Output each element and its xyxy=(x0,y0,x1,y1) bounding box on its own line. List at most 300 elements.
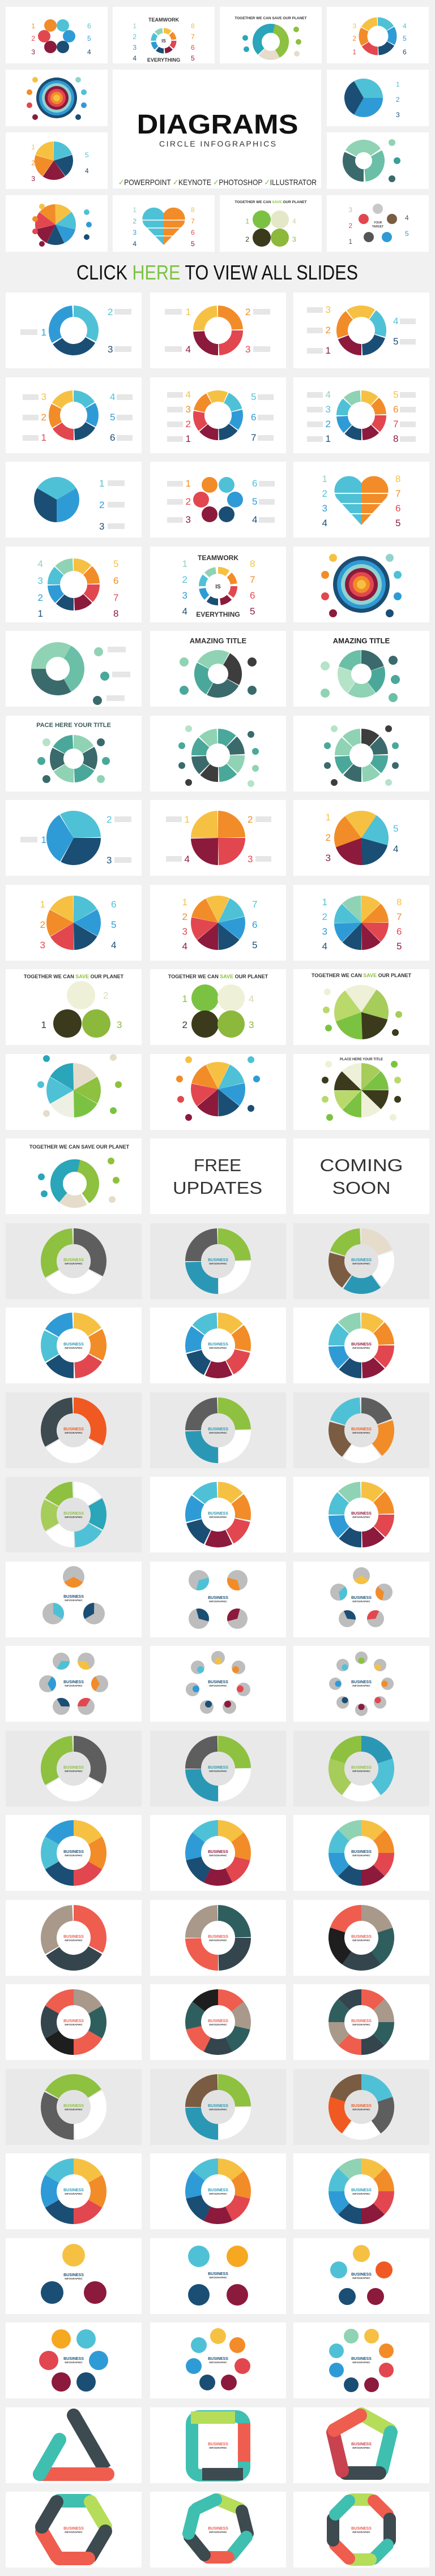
row 3: teamwork: 3 xyxy=(182,590,187,601)
row 2: hexagons: 3 xyxy=(186,514,191,525)
row 6: pie 4: 4 xyxy=(185,854,190,865)
tile: 6 ring: 1 xyxy=(352,48,356,56)
software list: ✓POWERPOINT ✓KEYNOTE ✓PHOTOSHOP ✓ILLUSTRATOR xyxy=(118,178,317,187)
row 1: 6 ring: 4 xyxy=(110,392,115,402)
row 7: pie 6: 6 xyxy=(111,899,116,910)
row 14: swirl 8: INFOGRAPHIC xyxy=(352,1516,371,1519)
tile: teamwork ring xyxy=(113,7,215,63)
tile: heart: 3 xyxy=(133,229,137,236)
row 2: yin yang: 3 xyxy=(99,521,104,532)
row 7: pie 7: 4 xyxy=(182,941,187,952)
row 2: hexagons: 6 xyxy=(252,478,257,489)
tile: pie 5: 3 xyxy=(31,175,35,183)
tile: teamwork ring: 8 xyxy=(191,22,195,30)
row 18: puzzle 7: INFOGRAPHIC xyxy=(209,1854,228,1857)
tile: hexagons: 6 xyxy=(87,22,91,30)
row 7: pie 8: 8 xyxy=(396,897,402,908)
row 2: hexagons: 5 xyxy=(252,496,257,507)
tile: 6 ring: 4 xyxy=(403,22,407,30)
row 9: planet petals 6 xyxy=(6,1054,142,1130)
row 6: pie 3 xyxy=(6,800,142,876)
tile: 6 ring: 3 xyxy=(352,22,356,30)
row 13: 5: BUSINESS xyxy=(351,1427,372,1431)
row 1: 6 ring xyxy=(6,377,142,453)
row 4: amazing title 4: AMAZING TITLE xyxy=(190,637,247,645)
row 2: heart: 1 xyxy=(322,474,327,484)
row 3: petal ring 8: 1 xyxy=(38,608,43,619)
row 8: clover 4: 3 xyxy=(249,1020,254,1030)
tile: heart: 1 xyxy=(133,206,137,214)
tile: yin yang: 2 xyxy=(396,96,400,104)
row 26: hexagon 6: BUSINESS xyxy=(63,2527,84,2531)
row 3: target xyxy=(293,547,429,622)
row 3: teamwork: 1 xyxy=(182,558,187,569)
row 1: 7 ring: 5 xyxy=(251,392,256,402)
row 11: business 5: BUSINESS xyxy=(351,1258,372,1262)
row 6: pie 5 xyxy=(293,800,429,876)
row 25: square: BUSINESS xyxy=(208,2442,228,2446)
row 1: 7 ring: 7 xyxy=(251,432,256,443)
tile: pie 5: 2 xyxy=(31,159,35,167)
row 12: business 7 xyxy=(150,1308,286,1383)
row 20: coral 6 xyxy=(6,1984,142,2060)
tile: heart: 7 xyxy=(191,217,195,225)
row 7: pie 7: 2 xyxy=(182,911,187,922)
row 22: shutter 7: BUSINESS xyxy=(208,2188,228,2192)
row 1: 8 ring: 5 xyxy=(393,389,398,400)
row 9: petals 8 green: PLACE HERE YOUR TITLE xyxy=(340,1058,383,1061)
row 15: gray circles 5 xyxy=(293,1562,429,1637)
row 20: coral 7: BUSINESS xyxy=(208,2019,228,2023)
row 22: shutter 6: INFOGRAPHIC xyxy=(65,2192,83,2195)
row 4: amazing title 5 xyxy=(293,631,429,707)
row 11: business 3 xyxy=(6,1223,142,1299)
tile: 6 ring: 2 xyxy=(352,35,356,42)
tile: teamwork ring: 5 xyxy=(191,54,195,62)
row 3: teamwork: 7 xyxy=(250,574,255,585)
row 17: puzzle 3 xyxy=(6,1731,142,1807)
row 1: 7 ring: 6 xyxy=(251,412,256,423)
row 6: pie 3: 1 xyxy=(41,835,46,845)
row 3: teamwork: EVERYTHING xyxy=(196,610,240,618)
tile: heart: 6 xyxy=(191,229,195,236)
tile: your target: 5 xyxy=(405,230,409,238)
tile: your target: 1 xyxy=(348,238,352,246)
row 11: business 4: BUSINESS xyxy=(208,1258,228,1262)
row 0: 3 ring: 1 xyxy=(41,327,46,338)
tile: heart: 4 xyxy=(133,240,137,248)
row 2: heart: 5 xyxy=(395,518,400,528)
row 11: business 4 xyxy=(150,1223,286,1299)
row 16: gray circles 6: INFOGRAPHIC xyxy=(65,1684,83,1687)
row 23: colored circles 5: INFOGRAPHIC xyxy=(352,2277,371,2280)
row 12: business 6: INFOGRAPHIC xyxy=(65,1347,83,1349)
row 7: pie 8: 1 xyxy=(322,897,327,908)
row 24: colored circles 6: INFOGRAPHIC xyxy=(65,2361,83,2364)
title: DIAGRAMS xyxy=(137,110,298,140)
row 4: amazing title 4 xyxy=(150,631,286,707)
row 1: 8 ring: 4 xyxy=(326,389,331,400)
row 19: coral 4 xyxy=(150,1900,286,1976)
row 1: 8 ring: 8 xyxy=(393,433,398,444)
tile: teamwork ring: 2 xyxy=(133,33,137,41)
tile: clover: 1 xyxy=(245,217,249,225)
row 8: clover 4: 4 xyxy=(249,994,254,1004)
row 22: shutter 8: BUSINESS xyxy=(351,2188,372,2192)
tile: 6 ring xyxy=(327,7,429,63)
row 2: heart xyxy=(293,462,429,537)
tile: heart: 8 xyxy=(191,206,195,214)
tile: teamwork ring: 7 xyxy=(191,33,195,41)
row 3: petal ring 8: 7 xyxy=(113,592,118,603)
row 7: pie 6: 1 xyxy=(40,899,45,910)
tile: 6 ring: 6 xyxy=(403,48,407,56)
row 3: teamwork: IS xyxy=(215,584,221,590)
tile: planet swirl: TOGETHER WE CAN SAVE OUR PLANET xyxy=(234,16,307,20)
tile: your target xyxy=(327,195,429,252)
row 1: 7 ring xyxy=(150,377,286,453)
row 6: pie 3: 3 xyxy=(106,855,112,866)
row 10: planet swirl xyxy=(6,1138,142,1214)
tile: yin yang xyxy=(327,70,429,126)
row 26: heptagon 7: BUSINESS xyxy=(208,2527,228,2531)
row 13: 5: INFOGRAPHIC xyxy=(352,1431,371,1434)
tile: pie 5: 1 xyxy=(31,143,35,151)
row 8: petals 5 xyxy=(293,969,429,1045)
subtitle: CIRCLE INFOGRAPHICS xyxy=(159,139,276,148)
row 8: clover 4: TOGETHER WE CAN SAVE OUR PLANET xyxy=(168,974,268,979)
row 24: colored circles 6: BUSINESS xyxy=(63,2357,84,2361)
row 18: puzzle 6: BUSINESS xyxy=(63,1850,84,1854)
row 12: business 8: INFOGRAPHIC xyxy=(352,1347,371,1349)
row 20: coral 8 xyxy=(293,1984,429,2060)
row 18: puzzle 7: BUSINESS xyxy=(208,1850,228,1854)
row 14: swirl 7 xyxy=(150,1477,286,1553)
row 12: business 7: BUSINESS xyxy=(208,1343,228,1347)
row 12: business 8 xyxy=(293,1308,429,1383)
row 16: gray circles 7: BUSINESS xyxy=(208,1680,228,1684)
row 23: colored circles 4: BUSINESS xyxy=(208,2272,228,2276)
row 16: gray circles 7: INFOGRAPHIC xyxy=(209,1684,228,1687)
row 21: swirl 5 gray: INFOGRAPHIC xyxy=(352,2108,371,2111)
row 11: business 4: INFOGRAPHIC xyxy=(209,1262,228,1265)
row 3: petal ring 8 xyxy=(6,547,142,622)
row 0: 3 ring: 2 xyxy=(108,307,113,317)
row 20: coral 7 xyxy=(150,1984,286,2060)
row 25: square: INFOGRAPHIC xyxy=(209,2446,228,2449)
tile: heart xyxy=(113,195,215,252)
row 5: swirl 8 b xyxy=(293,716,429,792)
row 15: gray circles 3: BUSINESS xyxy=(63,1595,84,1599)
row 7: pie 7: 3 xyxy=(182,926,187,937)
row 17: puzzle 5 xyxy=(293,1731,429,1807)
row 12: business 7: INFOGRAPHIC xyxy=(209,1347,228,1349)
tile: your target: YOUR xyxy=(374,221,382,225)
row 19: coral 5: BUSINESS xyxy=(351,1935,372,1939)
tile: teamwork ring: EVERYTHING xyxy=(147,57,180,63)
row 3: teamwork: 6 xyxy=(250,590,255,601)
row 21: swirl 4 gray: BUSINESS xyxy=(208,2104,228,2108)
row 10: free updates: UPDATES xyxy=(173,1178,262,1198)
row 7: pie 6 xyxy=(6,885,142,961)
row 14: hexagon swirl 6: INFOGRAPHIC xyxy=(65,1516,83,1519)
row 0: 5 ring: 4 xyxy=(393,316,398,326)
row 19: coral 3: BUSINESS xyxy=(63,1935,84,1939)
row 20: coral 6: BUSINESS xyxy=(63,2019,84,2023)
row 17: puzzle 4: INFOGRAPHIC xyxy=(209,1770,228,1773)
row 14: swirl 8 xyxy=(293,1477,429,1553)
row 7: pie 8: 4 xyxy=(322,941,327,952)
row 18: puzzle 8: BUSINESS xyxy=(351,1850,372,1854)
row 17: puzzle 5: INFOGRAPHIC xyxy=(352,1770,371,1773)
row 21: swirl 3 gray: BUSINESS xyxy=(63,2104,84,2108)
row 1: 6 ring: 5 xyxy=(110,412,115,423)
row 0: 3 ring: 3 xyxy=(108,344,113,355)
row 8: planet 3 circles: 1 xyxy=(41,1020,46,1030)
row 14: swirl 7: INFOGRAPHIC xyxy=(209,1516,228,1519)
row 0: 5 ring: 2 xyxy=(326,325,331,336)
row 14: hexagon swirl 6: BUSINESS xyxy=(63,1512,84,1516)
row 10: coming soon: COMING xyxy=(319,1155,403,1175)
row 5: pace here your title: PACE HERE YOUR TITLE xyxy=(36,722,111,729)
tile: teamwork ring: IS xyxy=(161,38,166,44)
tile: clover: 4 xyxy=(292,217,296,225)
row 10: free updates xyxy=(150,1138,286,1214)
row 16: gray circles 8: INFOGRAPHIC xyxy=(352,1684,371,1687)
row 11: business 3: BUSINESS xyxy=(63,1258,84,1262)
row 6: pie 5: 4 xyxy=(393,844,398,854)
row 13: triangle 3: BUSINESS xyxy=(63,1427,84,1431)
row 19: coral 3 xyxy=(6,1900,142,1976)
row 5: pace here your title xyxy=(6,716,142,792)
tile: your target: 3 xyxy=(348,206,352,214)
row 1: 7 ring: 3 xyxy=(186,404,191,415)
row 0: 5 ring xyxy=(293,293,429,368)
row 10: free updates: FREE xyxy=(194,1155,241,1175)
row 14: hexagon swirl 6 xyxy=(6,1477,142,1553)
row 18: puzzle 8 xyxy=(293,1815,429,1891)
row 13: 4: INFOGRAPHIC xyxy=(209,1431,228,1434)
row 2: yin yang xyxy=(6,462,142,537)
row 26: heptagon 7 xyxy=(150,2492,286,2568)
row 6: pie 5: 5 xyxy=(393,823,398,834)
row 7: pie 8: 7 xyxy=(396,911,402,922)
row 25: pentagon: INFOGRAPHIC xyxy=(352,2446,371,2449)
row 4: swirl 3 xyxy=(6,631,142,707)
row 8: planet 3 circles: 3 xyxy=(117,1020,122,1030)
tile: pie 5 xyxy=(6,132,108,189)
tile: clover: 3 xyxy=(292,235,296,243)
row 8: petals 5: TOGETHER WE CAN SAVE OUR PLANET xyxy=(312,973,412,978)
row 9: petals 7 colorful xyxy=(150,1054,286,1130)
row 20: coral 8: BUSINESS xyxy=(351,2019,372,2023)
row 14: swirl 7: BUSINESS xyxy=(208,1512,228,1516)
row 6: pie 4 xyxy=(150,800,286,876)
row 8: clover 4: 2 xyxy=(182,1020,187,1030)
tile: mint swirl xyxy=(327,132,429,189)
row 0: 4 ring: 4 xyxy=(186,344,191,355)
row 6: pie 5: 1 xyxy=(326,812,331,823)
row 18: puzzle 8: INFOGRAPHIC xyxy=(352,1854,371,1857)
row 6: pie 4: 1 xyxy=(185,814,190,825)
row 0: 5 ring: 5 xyxy=(393,336,398,347)
tile: hexagons: 2 xyxy=(31,35,35,42)
row 7: pie 7 xyxy=(150,885,286,961)
row 3: teamwork: 4 xyxy=(182,606,187,617)
row 24: colored circles 8 xyxy=(293,2323,429,2398)
row 3: petal ring 8: 6 xyxy=(113,575,118,586)
row 25: pentagon xyxy=(293,2407,429,2483)
panel: title card xyxy=(113,70,321,188)
row 21: swirl 5 gray: BUSINESS xyxy=(351,2104,372,2108)
row 26: hexagon 6: INFOGRAPHIC xyxy=(65,2531,83,2534)
row 0: 3 ring xyxy=(6,293,142,368)
row 7: pie 8: 2 xyxy=(322,911,327,922)
row 3: petal ring 8: 5 xyxy=(113,558,118,569)
row 7: pie 6: 5 xyxy=(111,919,116,930)
row 11: business 3: INFOGRAPHIC xyxy=(65,1262,83,1265)
row 23: colored circles 3: INFOGRAPHIC xyxy=(65,2277,83,2280)
row 15: gray circles 4: BUSINESS xyxy=(208,1596,228,1600)
row 17: puzzle 4 xyxy=(150,1731,286,1807)
row 1: 7 ring: 4 xyxy=(186,389,191,400)
row 2: yin yang: 1 xyxy=(99,478,104,489)
row 0: 4 ring: 2 xyxy=(245,307,250,317)
row 24: colored circles 8: BUSINESS xyxy=(351,2357,372,2361)
row 25: square xyxy=(150,2407,286,2483)
tile: teamwork ring: 3 xyxy=(133,44,137,51)
row 20: coral 7: INFOGRAPHIC xyxy=(209,2023,228,2026)
row 17: puzzle 4: BUSINESS xyxy=(208,1766,228,1770)
row 20: coral 8: INFOGRAPHIC xyxy=(352,2023,371,2026)
row 22: shutter 8: INFOGRAPHIC xyxy=(352,2192,371,2195)
row 23: colored circles 3 xyxy=(6,2238,142,2314)
row 0: 4 ring: 1 xyxy=(186,307,191,317)
tile: clover: 2 xyxy=(245,235,249,243)
row 13: 4 xyxy=(150,1392,286,1468)
row 22: shutter 8 xyxy=(293,2153,429,2229)
row 1: 7 ring: 2 xyxy=(186,419,191,429)
row 6: pie 4: 2 xyxy=(248,814,253,825)
row 1: 8 ring: 2 xyxy=(326,419,331,429)
row 7: pie 8: 5 xyxy=(396,941,402,952)
row 22: shutter 6 xyxy=(6,2153,142,2229)
row 1: 6 ring: 1 xyxy=(41,432,46,443)
row 7: pie 7: 5 xyxy=(252,940,257,951)
row 9: petals 8 green xyxy=(293,1054,429,1130)
row 1: 8 ring: 3 xyxy=(326,404,331,415)
row 7: pie 8 xyxy=(293,885,429,961)
row 7: pie 7: 7 xyxy=(252,899,257,910)
tile: clover xyxy=(220,195,322,252)
row 8: planet 3 circles: 2 xyxy=(103,990,108,1001)
row 23: colored circles 4 xyxy=(150,2238,286,2314)
row 6: pie 4: 3 xyxy=(248,854,253,865)
row 16: gray circles 8 xyxy=(293,1646,429,1722)
row 16: gray circles 6 xyxy=(6,1646,142,1722)
row 2: heart: 6 xyxy=(395,503,400,514)
row 18: puzzle 7 xyxy=(150,1815,286,1891)
row 1: 8 ring: 7 xyxy=(393,419,398,429)
row 5: swirl 8 xyxy=(150,716,286,792)
row 24: colored circles 7: BUSINESS xyxy=(208,2357,228,2361)
row 7: pie 8: 3 xyxy=(322,926,327,937)
row 2: hexagons: 1 xyxy=(186,478,191,489)
row 26: octagon 8: INFOGRAPHIC xyxy=(352,2531,371,2534)
row 22: shutter 6: BUSINESS xyxy=(63,2188,84,2192)
row 21: swirl 4 gray: INFOGRAPHIC xyxy=(209,2108,228,2111)
row 22: shutter 7 xyxy=(150,2153,286,2229)
tile: pie 5: 4 xyxy=(85,167,89,175)
row 1: 8 ring: 1 xyxy=(326,433,331,444)
row 6: pie 5: 2 xyxy=(326,832,331,843)
row 24: colored circles 8: INFOGRAPHIC xyxy=(352,2361,371,2364)
tile: teamwork ring: 4 xyxy=(133,54,137,62)
tile: clover: TOGETHER WE CAN SAVE OUR PLANET xyxy=(234,200,307,204)
row 8: planet 3 circles: TOGETHER WE CAN SAVE OUR PLANET xyxy=(24,974,124,979)
row 15: gray circles 3: INFOGRAPHIC xyxy=(65,1599,83,1602)
row 3: teamwork: 2 xyxy=(182,574,187,585)
tile: hexagons xyxy=(6,7,108,63)
row 12: business 8: BUSINESS xyxy=(351,1343,372,1347)
row 13: triangle 3 xyxy=(6,1392,142,1468)
row 10: coming soon xyxy=(293,1138,429,1214)
row 13: triangle 3: INFOGRAPHIC xyxy=(65,1431,83,1434)
tile: yin yang: 3 xyxy=(396,111,400,119)
row 18: puzzle 6 xyxy=(6,1815,142,1891)
row 6: pie 5: 3 xyxy=(326,853,331,863)
row 6: pie 3: 2 xyxy=(106,814,112,825)
row 10: coming soon: SOON xyxy=(332,1178,391,1198)
row 24: colored circles 7 xyxy=(150,2323,286,2398)
tile: heart: 5 xyxy=(191,240,195,248)
row 2: heart: 2 xyxy=(322,488,327,499)
row 1: 8 ring xyxy=(293,377,429,453)
tile: planet swirl xyxy=(220,7,322,63)
row 2: heart: 4 xyxy=(322,518,327,528)
tile: heart: 2 xyxy=(133,217,137,225)
row 3: petal ring 8: 3 xyxy=(38,575,43,586)
row 13: 5 xyxy=(293,1392,429,1468)
row 15: gray circles 4 xyxy=(150,1562,286,1637)
row 23: colored circles 3: BUSINESS xyxy=(63,2273,84,2277)
row 3: teamwork xyxy=(150,547,286,622)
row 25: triangle xyxy=(6,2407,142,2483)
row 21: swirl 4 gray xyxy=(150,2069,286,2145)
row 1: 7 ring: 1 xyxy=(186,433,191,444)
row 1: 6 ring: 2 xyxy=(41,412,46,423)
row 2: heart: 3 xyxy=(322,503,327,514)
tile: 6 ring: 5 xyxy=(403,35,407,42)
row 0: 5 ring: 1 xyxy=(326,345,331,356)
row 14: swirl 8: BUSINESS xyxy=(351,1512,372,1516)
tile: hexagons: 5 xyxy=(87,35,91,42)
row 8: clover 4 xyxy=(150,969,286,1045)
row 3: petal ring 8: 4 xyxy=(38,558,43,569)
tile: teamwork ring: TEAMWORK xyxy=(148,17,179,23)
row 15: gray circles 5: BUSINESS xyxy=(351,1596,372,1600)
row 3: teamwork: 5 xyxy=(250,606,255,617)
row 24: colored circles 7: INFOGRAPHIC xyxy=(209,2361,228,2364)
row 23: colored circles 5 xyxy=(293,2238,429,2314)
row 16: gray circles 7 xyxy=(150,1646,286,1722)
row 3: teamwork: 8 xyxy=(250,558,255,569)
row 21: swirl 5 gray xyxy=(293,2069,429,2145)
row 1: 8 ring: 6 xyxy=(393,404,398,415)
row 26: heptagon 7: INFOGRAPHIC xyxy=(209,2531,228,2534)
row 17: puzzle 3: INFOGRAPHIC xyxy=(65,1770,83,1773)
row 16: gray circles 6: BUSINESS xyxy=(63,1680,84,1684)
